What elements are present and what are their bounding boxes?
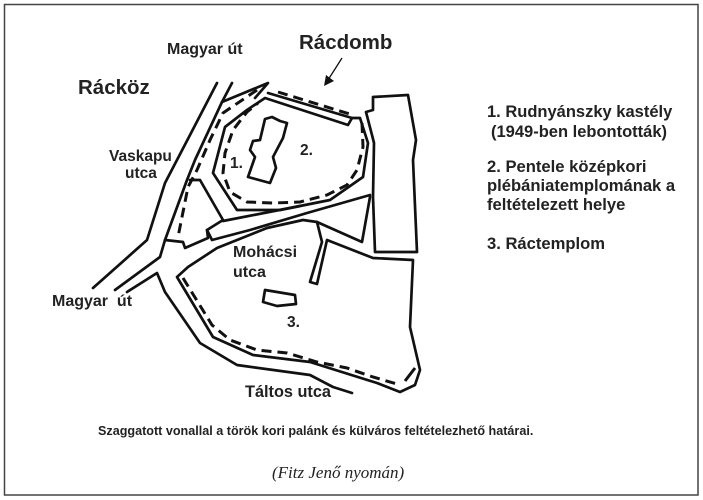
source: (Fitz Jenő nyomán) xyxy=(272,463,405,482)
label: Magyar út top: Magyar út xyxy=(167,41,243,58)
caption: Szaggatott vonallal a török kori palánk és külváros feltételezhető határai. xyxy=(98,424,533,438)
park outline xyxy=(213,93,368,210)
label: Táltos utca: Táltos utca xyxy=(245,383,332,401)
legend item 1: 1. Rudnyánszky kastély xyxy=(487,103,672,121)
arrow xyxy=(324,58,342,86)
legend item 2: feltételezett helye xyxy=(487,195,625,214)
label: Magyar út lower: Magyar út xyxy=(52,293,133,310)
label: Vaskapu utca: utca xyxy=(125,165,157,182)
lower area xyxy=(177,220,420,392)
map xyxy=(93,58,420,393)
number 2: 2. xyxy=(300,142,313,159)
number 1: 1. xyxy=(230,155,243,172)
label: Mohácsi utca: Mohácsi xyxy=(233,244,297,261)
label: Rácköz: Rácköz xyxy=(78,76,150,99)
church xyxy=(263,290,296,306)
road outlines xyxy=(93,83,370,393)
label: Rácdomb: Rácdomb xyxy=(299,31,392,54)
dashed boundary xyxy=(178,90,415,384)
right block xyxy=(366,95,417,252)
number 3: 3. xyxy=(287,314,300,331)
legend xyxy=(487,103,676,253)
castle xyxy=(248,117,287,183)
legend item 3: 3. Ráctemplom xyxy=(487,234,605,253)
legend item 1: (1949-ben lebontották) xyxy=(491,123,667,141)
label: Vaskapu utca: Vaskapu xyxy=(109,148,172,165)
legend item 2: plébániatemplomának a xyxy=(487,176,676,195)
label: Mohácsi utca: utca xyxy=(233,264,266,281)
triangle block xyxy=(317,197,370,242)
legend item 2: 2. Pentele középkori xyxy=(487,157,647,176)
